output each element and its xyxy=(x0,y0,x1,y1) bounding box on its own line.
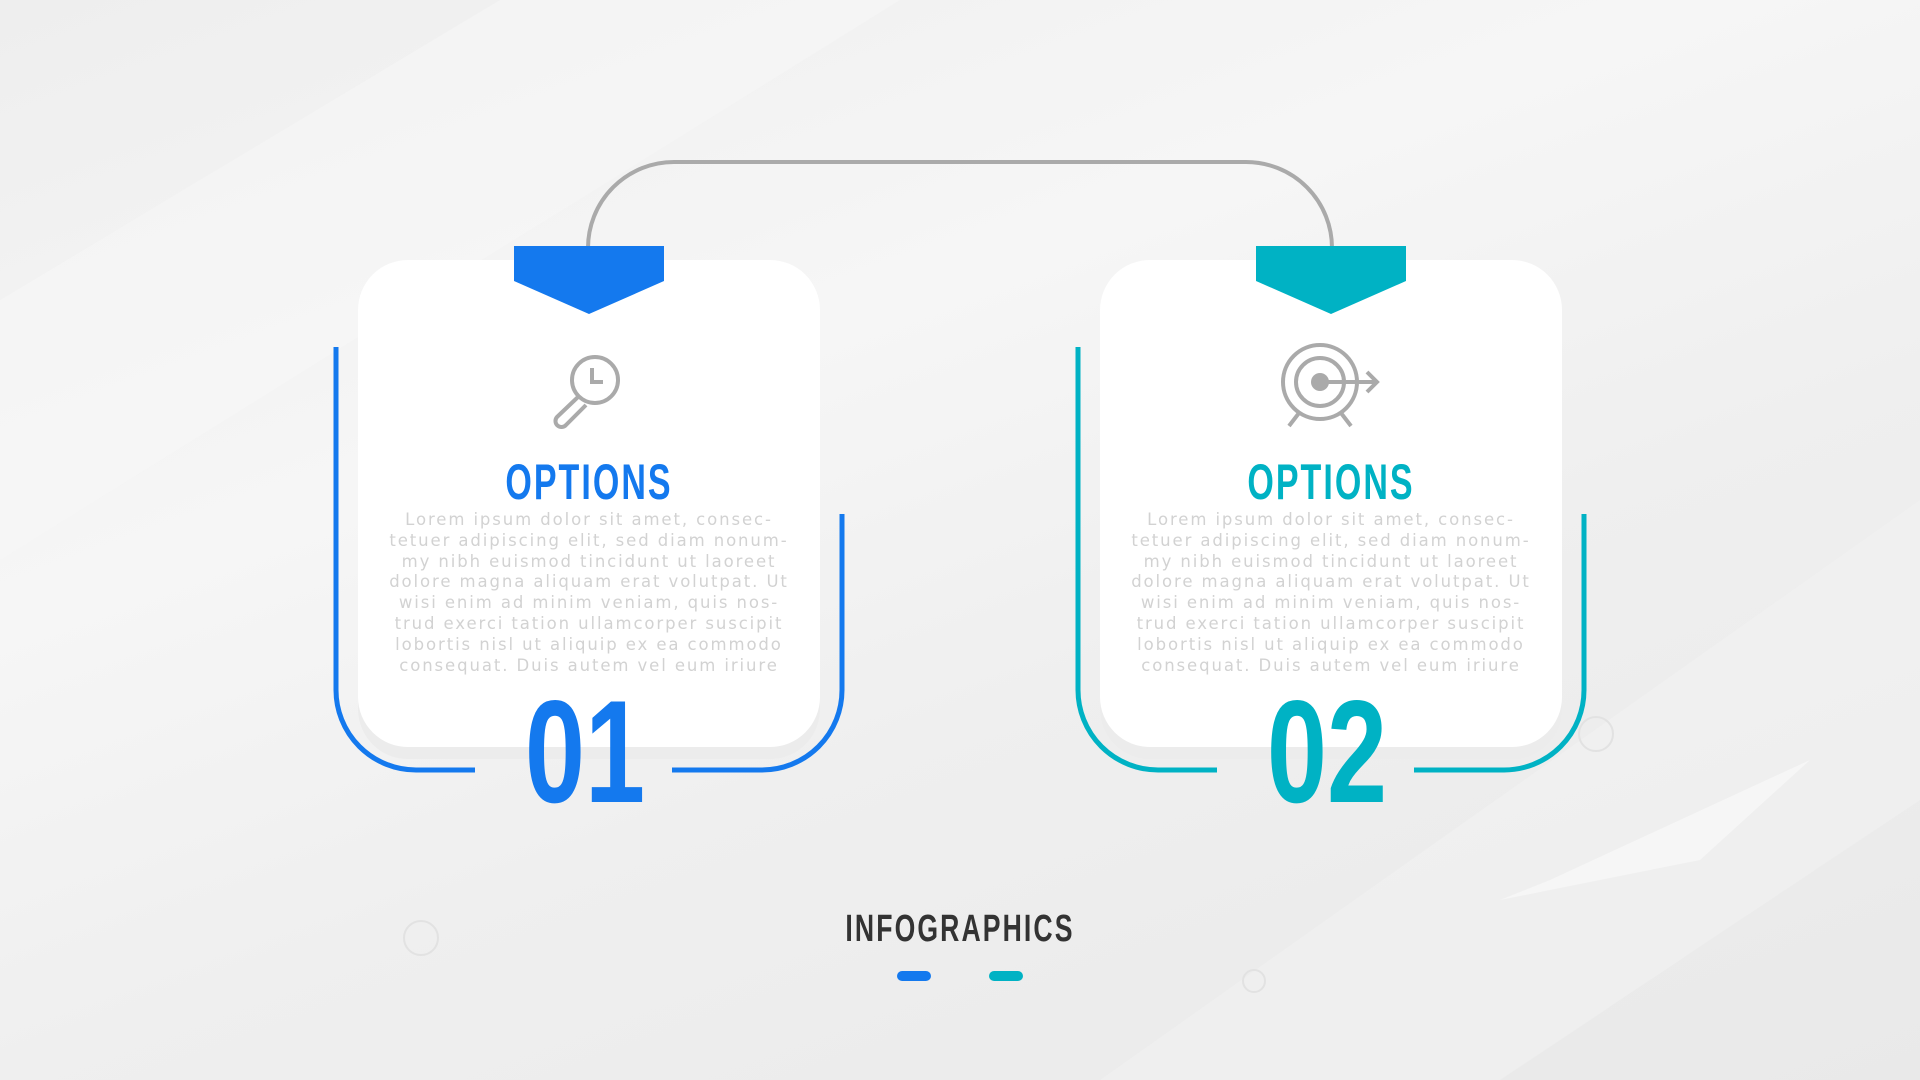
text 1 xyxy=(389,510,789,675)
text 2: trud exerci tation ullamcorper suscipit xyxy=(1137,614,1525,633)
text 1: tetuer adipiscing elit, sed diam nonum- xyxy=(389,531,789,550)
text 2: dolore magna aliquam erat volutpat. Ut xyxy=(1131,572,1531,591)
number 01: 01 xyxy=(525,670,645,833)
text 2: my nibh euismod tincidunt ut laoreet xyxy=(1144,552,1518,571)
panel: option 01 xyxy=(334,246,844,833)
text 1: lobortis nisl ut aliquip ex ea commodo xyxy=(395,635,783,654)
text 1: my nibh euismod tincidunt ut laoreet xyxy=(402,552,776,571)
text 1: dolore magna aliquam erat volutpat. Ut xyxy=(389,572,789,591)
text 2 xyxy=(1131,510,1531,675)
icon: magnifier clock xyxy=(554,355,620,429)
text 1: wisi enim ad minim veniam, quis nos- xyxy=(399,593,779,612)
text 2: Lorem ipsum dolor sit amet, consec- xyxy=(1147,510,1515,529)
bracket 1 xyxy=(334,347,844,772)
text 1: Lorem ipsum dolor sit amet, consec- xyxy=(405,510,773,529)
card 2 xyxy=(1100,260,1562,747)
footer dashes xyxy=(897,971,1023,981)
heading 1: OPTIONS xyxy=(505,454,673,510)
banner 1 xyxy=(514,246,664,314)
text 2: wisi enim ad minim veniam, quis nos- xyxy=(1141,593,1521,612)
icon: target xyxy=(1281,343,1380,428)
text 1: trud exerci tation ullamcorper suscipit xyxy=(395,614,783,633)
card 1 xyxy=(358,260,820,747)
text 2: tetuer adipiscing elit, sed diam nonum- xyxy=(1131,531,1531,550)
number 02: 02 xyxy=(1267,670,1387,833)
heading 2: OPTIONS xyxy=(1247,454,1415,510)
text 2: lobortis nisl ut aliquip ex ea commodo xyxy=(1137,635,1525,654)
text 2: consequat. Duis autem vel eum iriure xyxy=(1141,656,1521,675)
footer title: INFOGRAPHICS xyxy=(845,908,1075,950)
banner 2 xyxy=(1256,246,1406,314)
text 1: consequat. Duis autem vel eum iriure xyxy=(399,656,779,675)
bracket 2 xyxy=(1076,347,1586,772)
panel: option 02 xyxy=(1076,246,1586,833)
